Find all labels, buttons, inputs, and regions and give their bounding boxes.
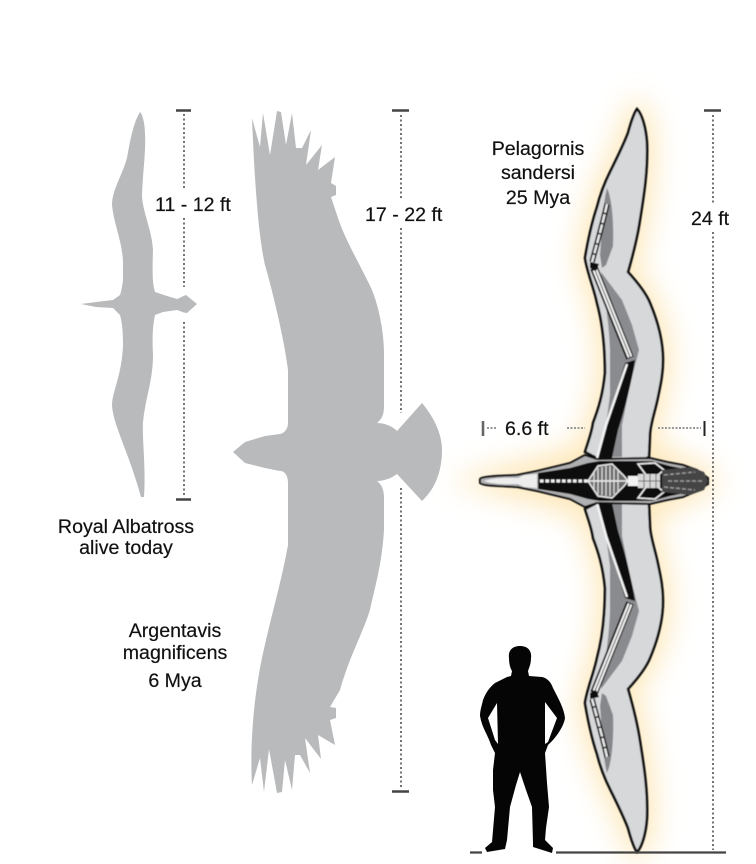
albatross wingspan dimension line [176,110,191,500]
argentavis name: 6 Mya [148,670,202,692]
argentavis name: Argentavis [129,620,221,642]
gaps between arms and torso [488,702,557,744]
body length label: 6.6 ft [505,418,549,440]
upper wing [585,109,663,470]
pelagornis name: Pelagornis [492,138,584,160]
albatross wingspan label: 11 - 12 ft [155,194,231,216]
pelagornis skeleton figure [480,109,708,852]
argentavis wingspan dimension line [392,110,409,792]
pelvis and shoulder bones [628,463,664,499]
pelagornis wingspan dimension line [704,110,721,850]
lower wing [585,491,663,852]
head [662,467,708,495]
albatross name: Royal Albatross [58,516,194,538]
pelagornis wingspan label: 24 ft [691,208,730,230]
argentavis name: magnificens [123,642,227,664]
ribcage [588,464,628,498]
argentavis silhouette [233,111,442,793]
glow behind pelagornis [480,109,708,852]
albatross name: alive today [79,537,173,559]
body and tail [480,455,708,507]
albatross silhouette [81,112,197,497]
human silhouette [480,646,565,853]
argentavis wingspan label: 17 - 22 ft [365,204,443,226]
pelagornis name: 25 Mya [506,187,570,209]
pelagornis name: sandersi [501,162,575,184]
ground line [470,851,726,854]
